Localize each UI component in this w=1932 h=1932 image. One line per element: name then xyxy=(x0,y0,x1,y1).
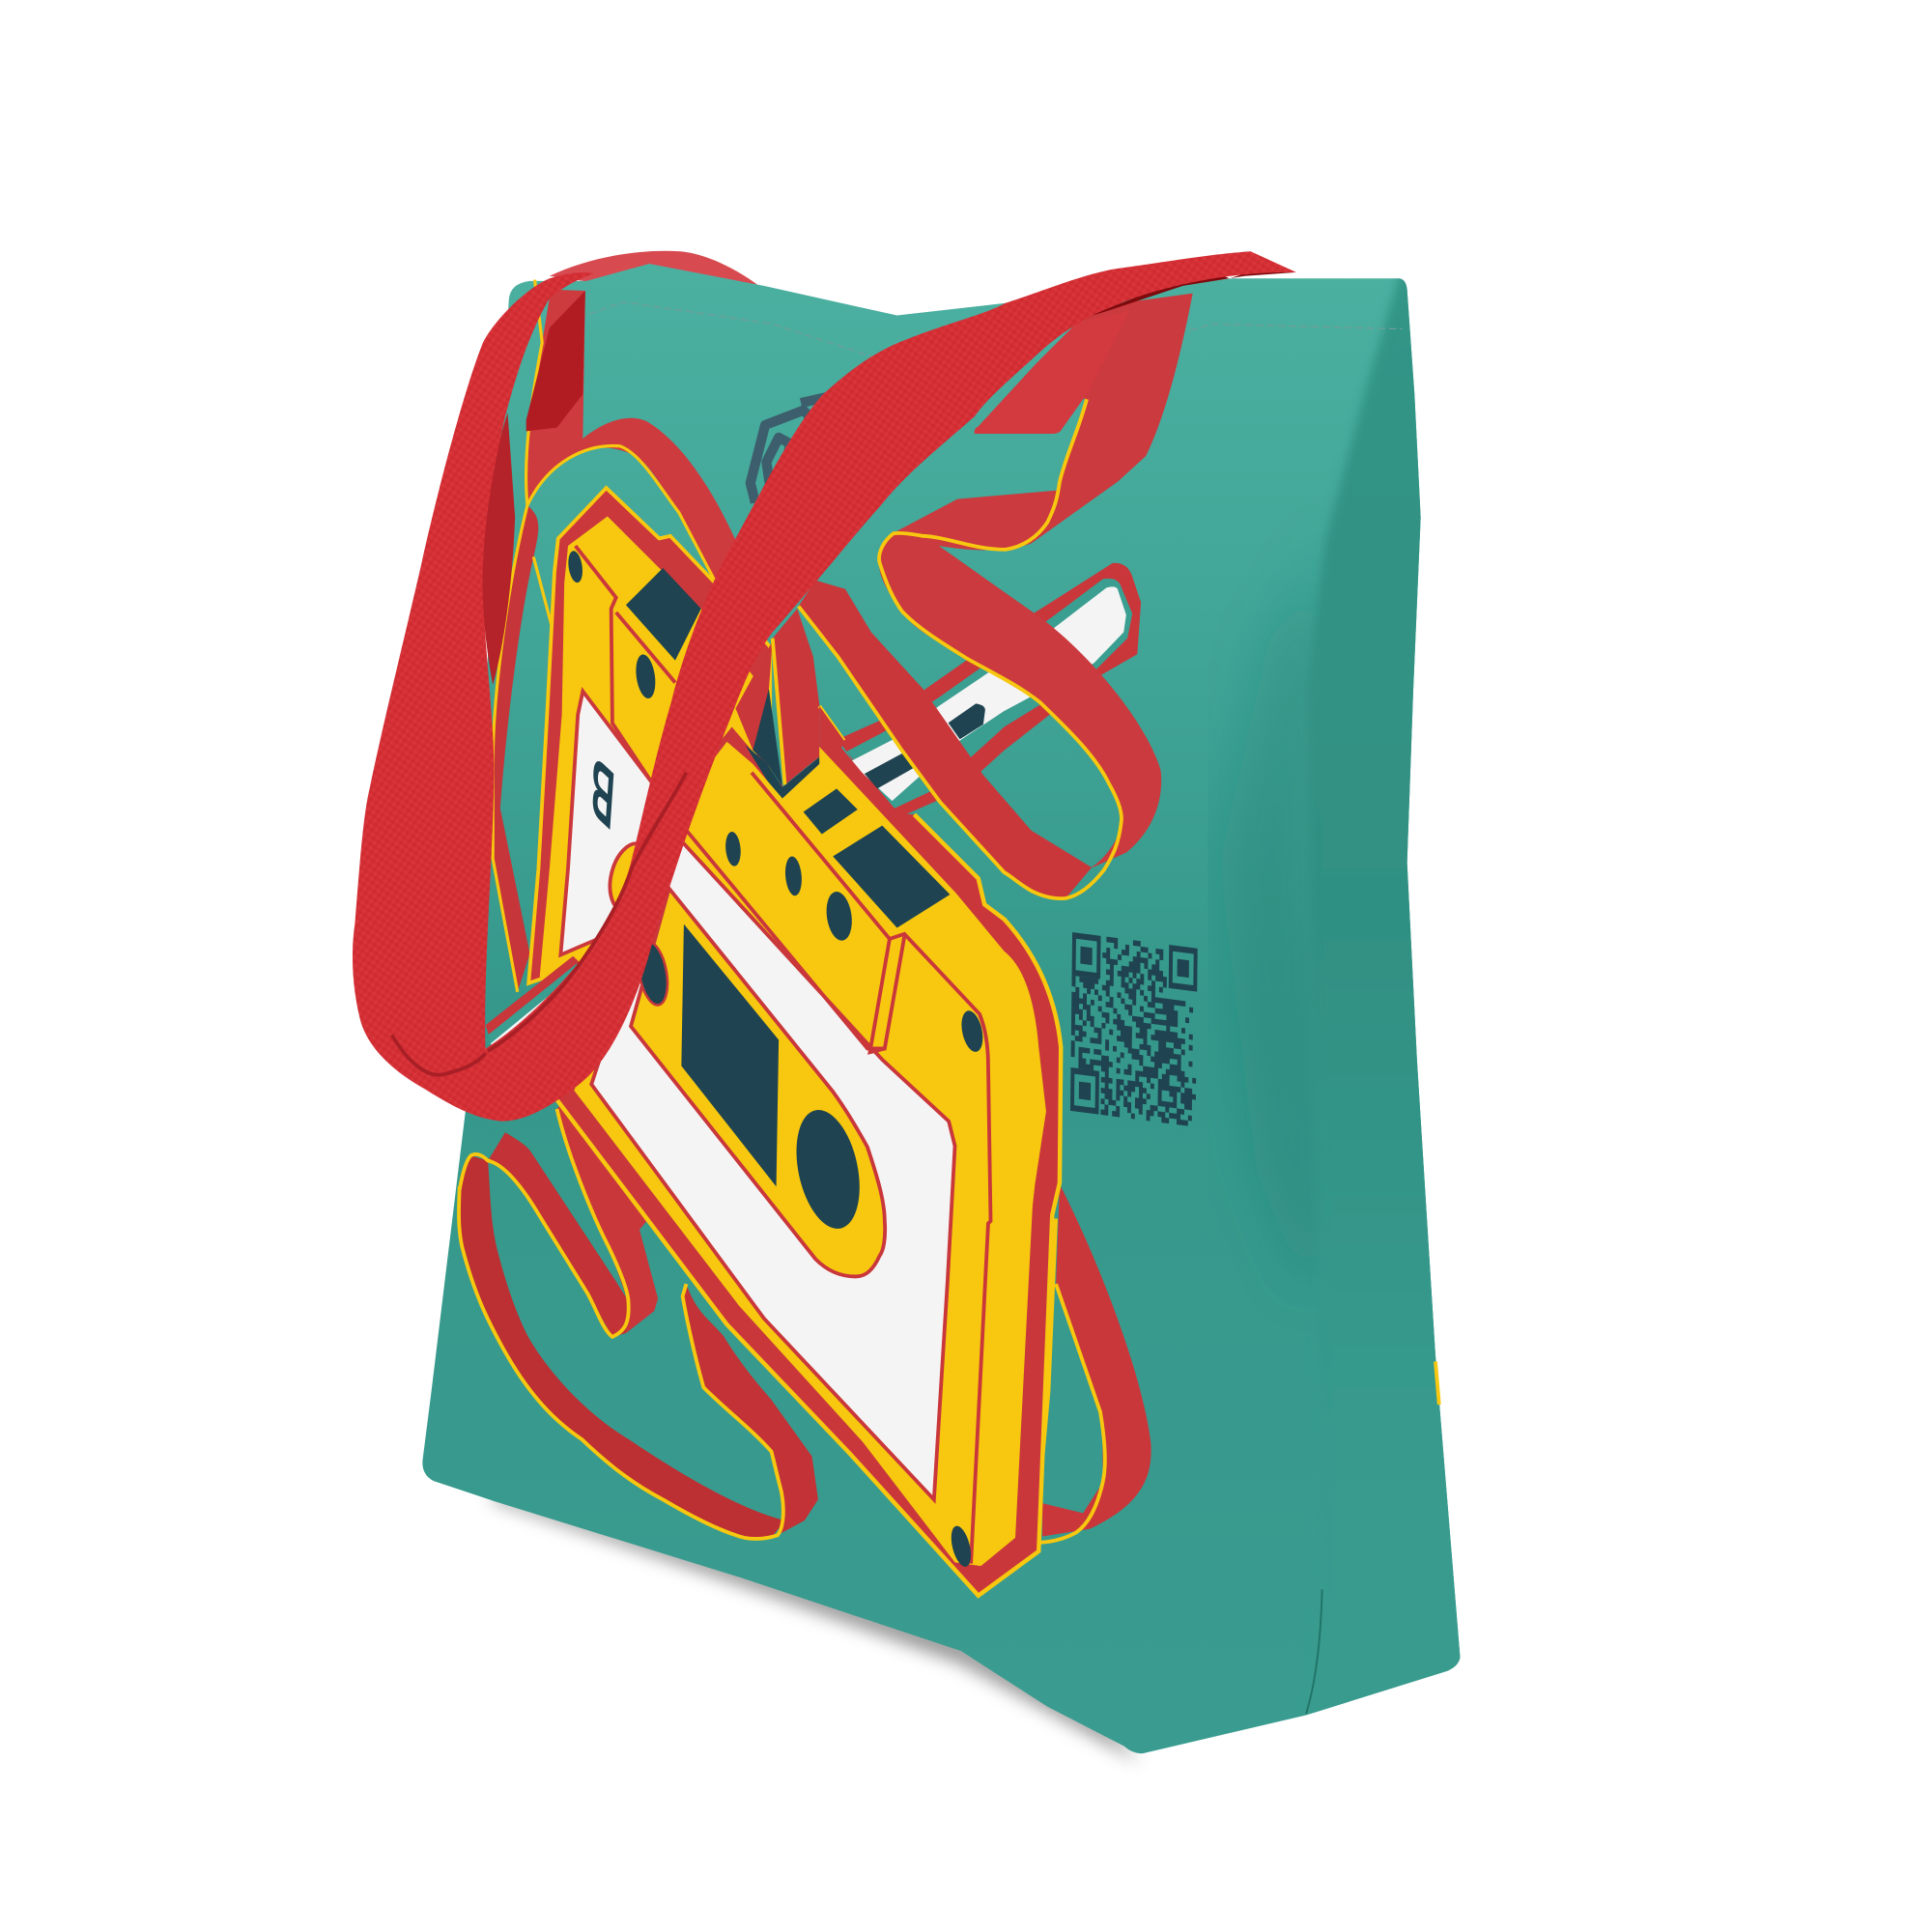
yellow print edge on the gusset xyxy=(1435,1361,1439,1405)
white label xyxy=(591,833,955,1499)
window xyxy=(626,568,701,661)
data modules xyxy=(1070,935,1198,1124)
main cassette xyxy=(554,706,1061,1596)
ground shadow xyxy=(493,1491,1140,1762)
top seam lines xyxy=(681,773,991,1564)
small white gap xyxy=(1204,267,1244,278)
tote bag product illustration xyxy=(353,251,1461,1765)
fold shading xyxy=(1222,603,1310,1192)
finder squares xyxy=(1070,932,1198,1127)
handle strap xyxy=(353,251,1296,1122)
small window xyxy=(804,788,858,835)
lower gusset seam xyxy=(1306,1589,1322,1714)
yellow shell xyxy=(540,516,764,977)
outer red body xyxy=(554,706,1061,1596)
strap fold lines xyxy=(392,773,686,1075)
outer yellow outline xyxy=(554,814,1061,1596)
back cassette (side B) xyxy=(528,488,770,983)
tape strip behind the cassette xyxy=(838,563,1141,819)
screw holes xyxy=(724,831,986,1569)
left inner tab xyxy=(526,291,585,431)
hub hole xyxy=(786,1104,869,1235)
tape ribbon: top right loop xyxy=(799,294,1193,898)
dark inner fold xyxy=(480,412,515,685)
bag body xyxy=(422,259,1479,1753)
yellow shell xyxy=(574,742,1046,1566)
printed logo xyxy=(751,397,828,502)
navy gap under the tape opening xyxy=(746,746,826,807)
white label xyxy=(560,692,659,955)
hub peeking out xyxy=(604,839,659,916)
red tote handles xyxy=(353,251,1296,1122)
dark underside of the handle xyxy=(1084,267,1296,318)
tape piece inside the handle loop xyxy=(486,956,591,1055)
strap weave texture xyxy=(353,251,1296,1122)
tape window xyxy=(681,924,779,1186)
right tab of the handle xyxy=(975,310,1130,434)
outer body xyxy=(528,488,770,983)
head window xyxy=(833,826,950,927)
tape ribbon: lower right xyxy=(1035,1184,1151,1543)
seam lines xyxy=(576,546,675,782)
tape ribbon: arch above back cassette xyxy=(493,280,739,992)
ribbon band and navy sliver behind the strap xyxy=(735,609,844,786)
QR code xyxy=(1070,932,1198,1127)
front panel xyxy=(422,264,1460,1753)
hub panel xyxy=(631,889,885,1276)
side letter: B xyxy=(588,736,617,848)
tape ribbons: lower left xyxy=(459,1103,818,1539)
back handle behind the bag xyxy=(550,251,759,286)
lower-side hole behind the strap xyxy=(634,940,672,1008)
screw holes xyxy=(566,550,584,583)
top stitching xyxy=(589,301,1403,368)
side gusset xyxy=(1305,278,1461,1716)
